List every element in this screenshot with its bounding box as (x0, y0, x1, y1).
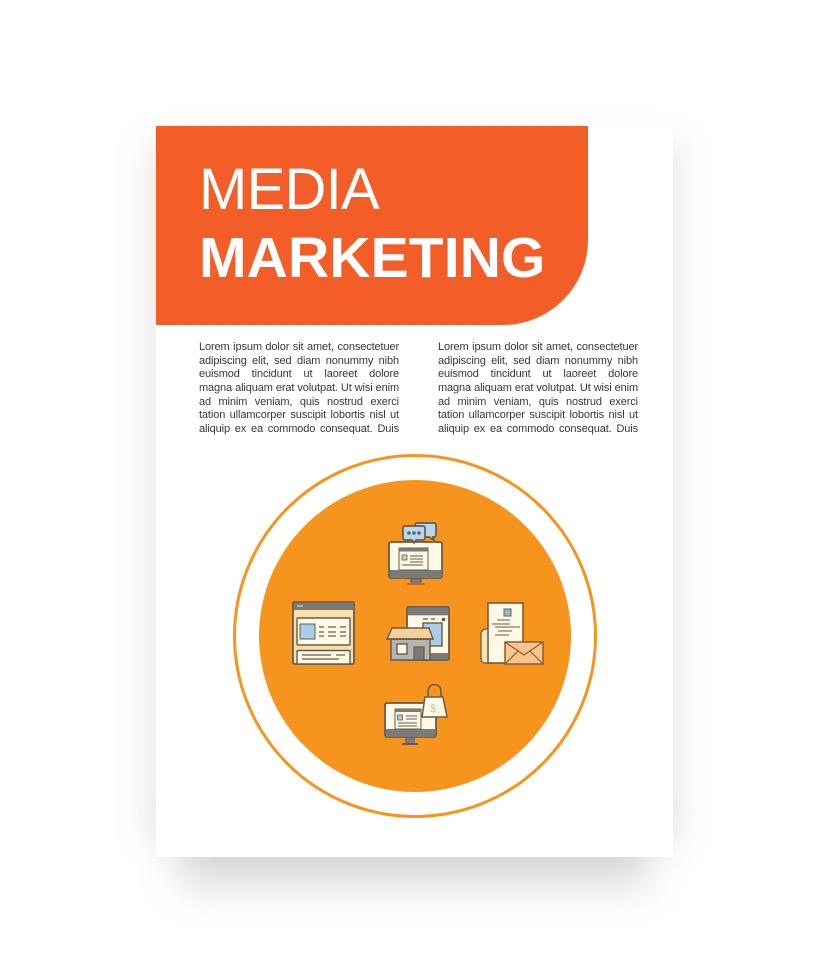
text column: right: adipiscing elit, sed diam nonummy nibh (438, 355, 638, 367)
text column: left: euismod tincidunt ut laoreet dolore (199, 368, 399, 380)
page shadow: sides (148, 140, 681, 845)
icon: monitor with shopping bag: $ (430, 703, 436, 715)
text column: left: Lorem ipsum dolor sit amet, consectetuer (199, 341, 399, 353)
outer ring (234, 456, 596, 816)
text column: right: aliquip ex ea commodo consequat. Duis (438, 423, 638, 435)
icon: document and envelope (481, 603, 543, 664)
text column: left (199, 341, 399, 435)
title: media: MEDIA (199, 157, 379, 222)
icon: monitor with shopping bag (385, 684, 447, 745)
text column: right (438, 341, 638, 435)
icon: web page layout (293, 602, 354, 664)
text column: right: tation ullamcorper suscipit lobortis nisl ut (438, 409, 638, 421)
text column: right: Lorem ipsum dolor sit amet, consectetuer (438, 341, 638, 353)
icon: shop with web window (387, 607, 449, 660)
text column: left: aliquip ex ea commodo consequat. Duis (199, 423, 399, 435)
text column: right: ad minim veniam, quis nostrud exerci (438, 396, 638, 408)
title: marketing: MARKETING (199, 226, 546, 290)
text column: right: euismod tincidunt ut laoreet dolore (438, 368, 638, 380)
text column: left: adipiscing elit, sed diam nonummy nibh (199, 355, 399, 367)
text column: right: magna aliquam erat volutpat. Ut wisi enim (438, 382, 638, 394)
icon: monitor with chat bubbles (389, 523, 442, 585)
text column: left: magna aliquam erat volutpat. Ut wisi enim (199, 382, 399, 394)
text column: left: ad minim veniam, quis nostrud exerci (199, 396, 399, 408)
orange disc (259, 480, 571, 792)
page shadow: bottom (180, 810, 649, 888)
header banner (156, 126, 588, 325)
text column: left: tation ullamcorper suscipit lobortis nisl ut (199, 409, 399, 421)
poster page (156, 126, 673, 857)
